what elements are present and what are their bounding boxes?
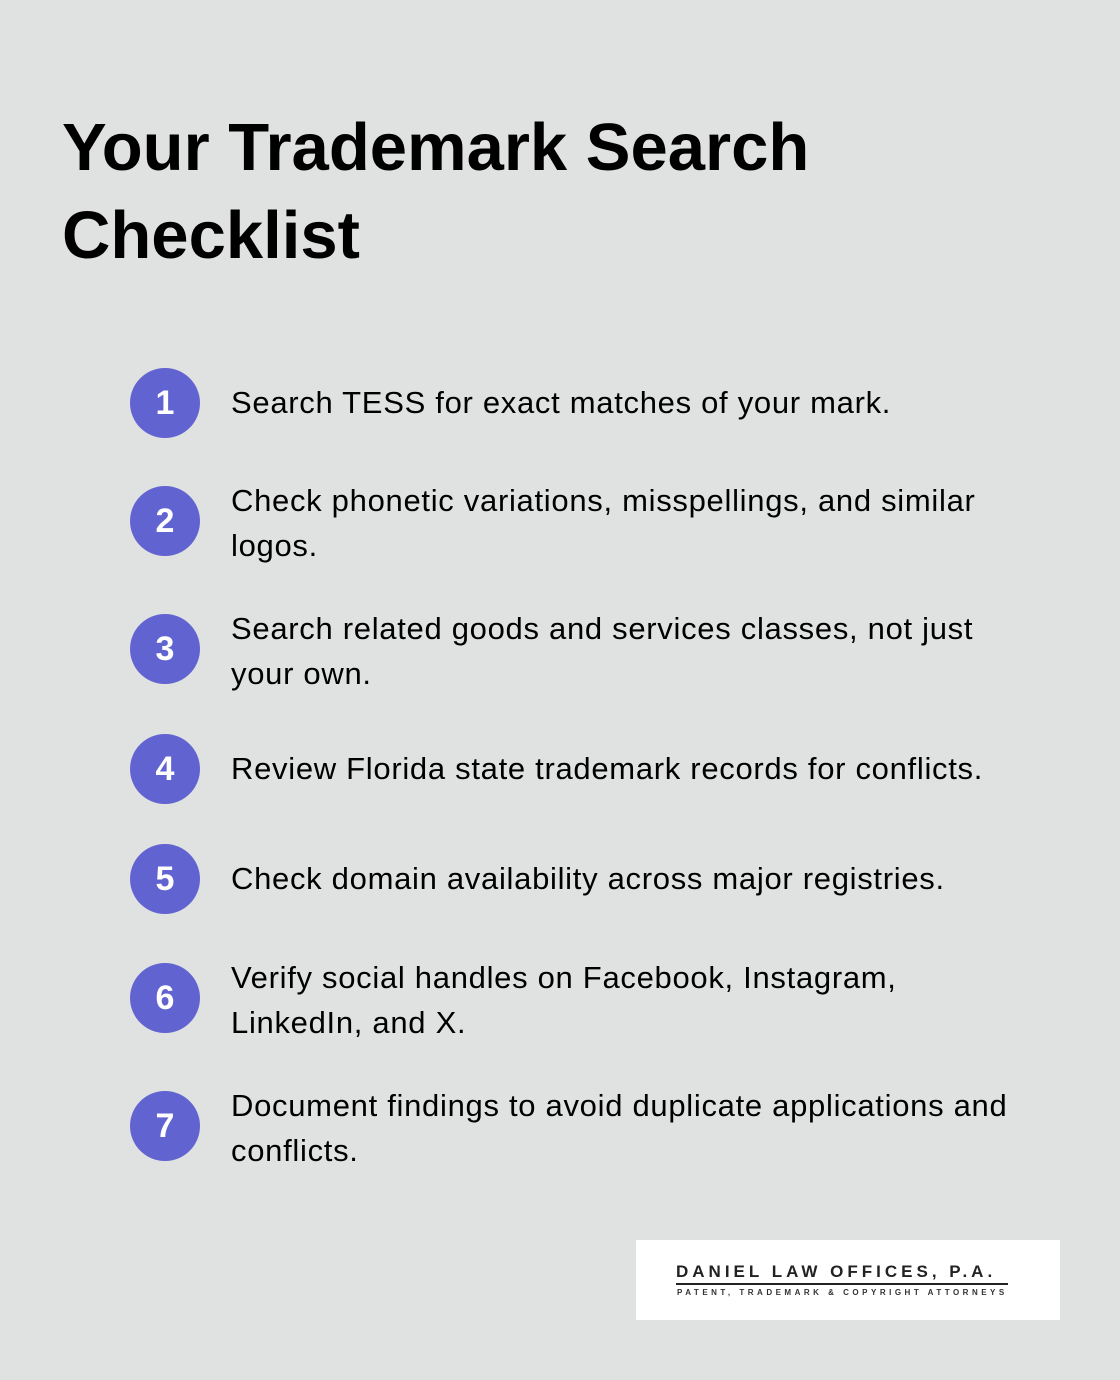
logo (636, 1240, 1060, 1320)
item 2 (130, 483, 976, 563)
title (62, 110, 809, 273)
title: Checklist (62, 198, 360, 273)
item 6 (130, 960, 897, 1040)
icon: number 4 (130, 734, 200, 804)
item 4 (130, 734, 983, 804)
text 3 (231, 611, 973, 691)
icon: number 4: 4 (156, 750, 174, 788)
icon: number 5 (130, 844, 200, 914)
item 3 (130, 611, 973, 691)
text 6: LinkedIn, and X. (231, 1005, 466, 1040)
text 3: Search related goods and services classes, not just (231, 611, 973, 646)
logo tagline: PATENT, TRADEMARK & COPYRIGHT ATTORNEYS (677, 1288, 1008, 1297)
icon: number 7 (130, 1091, 200, 1161)
text 2: Check phonetic variations, misspellings, and similar (231, 483, 976, 518)
icon: number 3 (130, 614, 200, 684)
logo name: DANIEL LAW OFFICES, P.A. (676, 1262, 996, 1281)
icon: number 2 (130, 486, 200, 556)
icon: number 6 (130, 963, 200, 1033)
text 5: Check domain availability across major registries. (231, 861, 945, 896)
icon: number 1 (130, 368, 200, 438)
title: Your Trademark Search (62, 110, 809, 185)
text 7: Document findings to avoid duplicate applications and (231, 1088, 1007, 1123)
icon: number 5: 5 (156, 860, 174, 898)
icon: number 3: 3 (156, 630, 174, 668)
item 5 (130, 844, 945, 914)
text 7: conflicts. (231, 1133, 359, 1168)
text 6: Verify social handles on Facebook, Instagram, (231, 960, 897, 995)
icon: number 7: 7 (156, 1107, 174, 1145)
text 4: Review Florida state trademark records for conflicts. (231, 751, 983, 786)
text 7 (231, 1088, 1007, 1168)
text 3: your own. (231, 656, 372, 691)
text 2 (231, 483, 976, 563)
icon: number 2: 2 (156, 502, 174, 540)
item 7 (130, 1088, 1007, 1168)
icon: number 6: 6 (156, 979, 174, 1017)
icon: number 1: 1 (156, 384, 174, 422)
item 1 (130, 368, 891, 438)
text 2: logos. (231, 528, 318, 563)
text 6 (231, 960, 897, 1040)
text 1: Search TESS for exact matches of your mark. (231, 385, 891, 420)
